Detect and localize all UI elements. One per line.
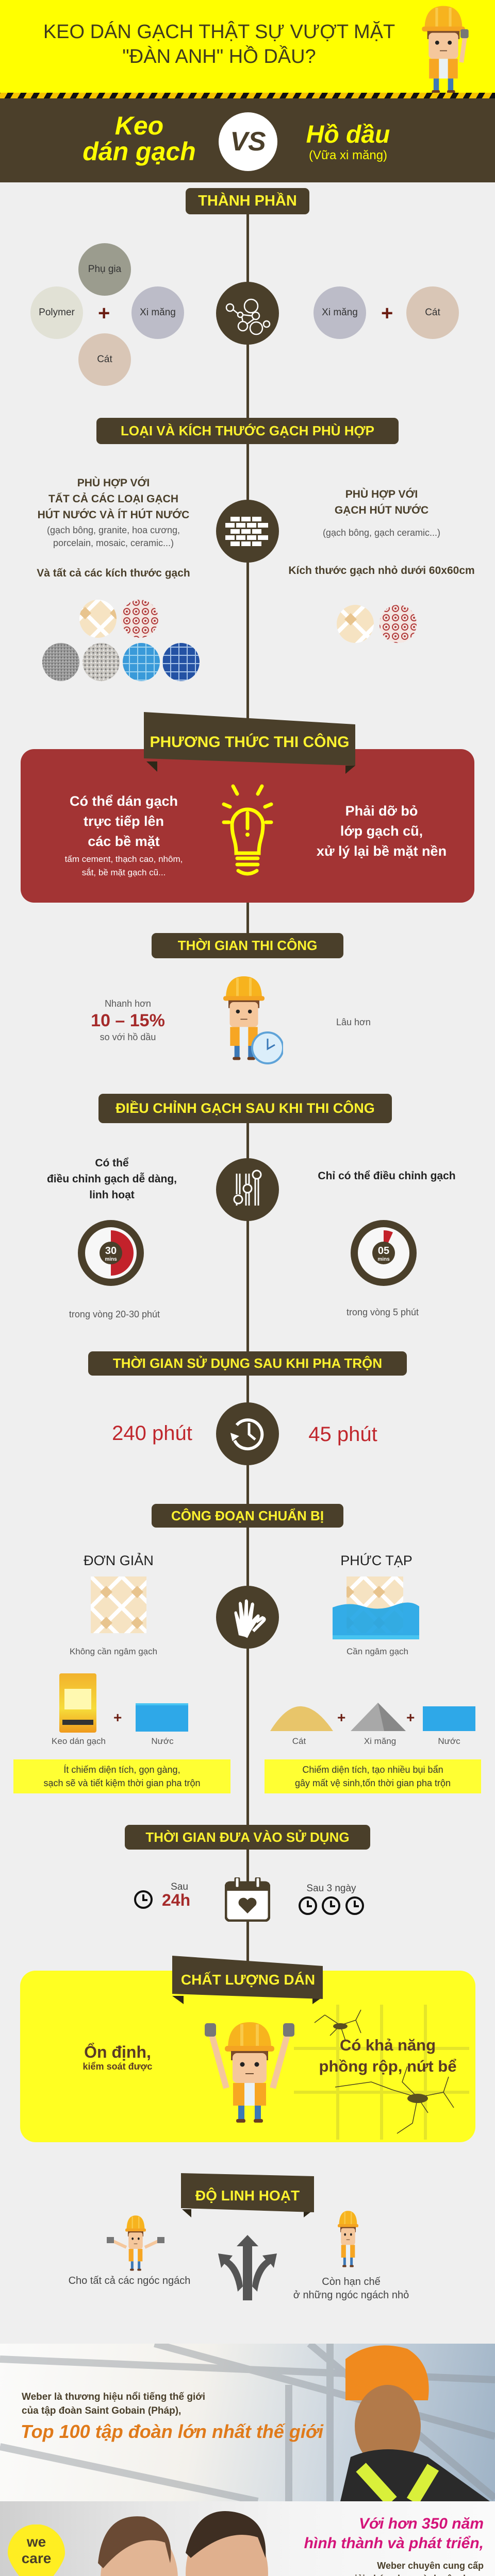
section: thời gian đưa vào sử dụng: [246, 1850, 249, 1971]
text: after 3 days: [299, 1883, 364, 1915]
left title: Keo dán gạch: [82, 111, 196, 166]
ingredients left: Phụ gia: [88, 264, 121, 275]
text: keo tile suitability: [37, 476, 190, 579]
icon: dry tile: [91, 1577, 146, 1633]
text: 240 phút: 240 phút: [112, 1422, 192, 1445]
text: limited: [278, 2275, 424, 2302]
ingredients left: +: [98, 302, 110, 325]
ribbon: độ linh hoạt: ĐỘ LINH HOẠT: [195, 2187, 300, 2204]
text: weber intro: Weber là thương hiệu nổi tiếng thế giới: [22, 2392, 205, 2402]
right title: Hồ dầu: (Vữa xi măng): [309, 148, 387, 162]
text: ho dau tile suitability: (gạch bông, gạch ceramic...): [323, 528, 440, 538]
text: ho dau tile suitability: Kích thước gạch nhỏ dưới 60x60cm: [288, 565, 475, 577]
icon: composition: [216, 282, 279, 345]
photo: weber construction worker: [0, 2344, 495, 2501]
text: 350 years: [304, 2514, 484, 2576]
icon: happy worker: [107, 2215, 164, 2271]
text: ho dau tile suitability: GẠCH HÚT NƯỚC: [335, 504, 428, 516]
icon: brick: [216, 500, 279, 563]
text: CÔNG ĐOẠN CHUẨN BỊ: [171, 1507, 324, 1523]
text: keo tile suitability: PHÙ HỢP VỚI: [77, 477, 150, 489]
icon: worker with clock: [223, 976, 283, 1064]
tile samples right: [337, 605, 417, 643]
icon: sad worker: [338, 2211, 358, 2267]
text: after 24h: Sau: [171, 1882, 188, 1892]
text: 350 years: Với hơn 350 năm: [359, 2515, 484, 2532]
icon: timer 05: [351, 1220, 417, 1286]
photo: couple: [0, 2501, 495, 2576]
ribbon: chất lượng dán: CHẤT LƯỢNG DÁN: [181, 1972, 315, 1988]
section: thành phần: [246, 214, 249, 418]
icon: we care pin: care: [22, 2550, 51, 2566]
text: faster: Nhanh hơn: [105, 998, 151, 1009]
ingredients left: [30, 243, 184, 386]
icon: timer 05: 05: [378, 1245, 389, 1257]
text: keo adjust: Có thể: [95, 1157, 129, 1169]
products: cát + xi măng + nước: [270, 1703, 475, 1746]
ingredients left: Polymer: [39, 307, 75, 318]
products: cát + xi măng + nước: Xi măng: [364, 1736, 396, 1746]
text: keo method: tấm cement, thạch cao, nhôm,: [65, 854, 183, 864]
icon: we care pin: we: [27, 2534, 46, 2550]
callout: keo benefits: [13, 1759, 230, 1793]
left title: Keo dán gạch: dán gạch: [82, 137, 196, 166]
icon: light bulb: [222, 784, 273, 876]
title: [43, 21, 395, 67]
text: keo method: Có thể dán gạch: [70, 793, 178, 809]
text: stable: Ổn định,: [84, 2043, 151, 2061]
text: after 3 days: Sau 3 ngày: [306, 1883, 356, 1894]
text: LOẠI VÀ KÍCH THƯỚC GẠCH PHÙ HỢP: [121, 423, 374, 438]
text: keo tile suitability: TẤT CẢ CÁC LOẠI GẠCH: [48, 493, 178, 505]
text: keo adjust: linh hoạt: [89, 1189, 135, 1201]
ingredients right: +: [381, 302, 393, 325]
callout: keo benefits: sạch sẽ và tiết kiệm thời gian pha trộn: [44, 1778, 200, 1788]
section: thời gian sử dụng: [246, 1376, 249, 1504]
text: keo method: các bề mặt: [88, 834, 160, 849]
text: ho dau method: xử lý lại bề mặt nền: [317, 843, 447, 859]
ribbon: phương thức thi công: [144, 712, 355, 774]
text: slower: Lâu hơn: [336, 1017, 371, 1027]
text: 5 minutes: trong vòng 5 phút: [346, 1307, 419, 1317]
text: ho dau method: Phải dỡ bỏ: [345, 803, 418, 819]
ingredients right: Xi măng: [322, 307, 358, 318]
right title: Hồ dầu: [306, 121, 390, 162]
products: cát + xi măng + nước: Nước: [438, 1736, 460, 1746]
products: keo + nước: Nước: [151, 1736, 174, 1746]
ingredients left: Xi măng: [140, 307, 176, 318]
section: điều chỉnh gạch: [246, 1123, 249, 1351]
icon: tile in water: [333, 1577, 419, 1639]
vs circle: [219, 112, 277, 171]
icon: fork arrow: [218, 2235, 277, 2300]
text: limited: Còn hạn chế: [322, 2276, 381, 2287]
panel: chất lượng dán: [20, 1971, 475, 2142]
callout: ho dau drawbacks: Chiếm diện tích, tạo nhiều bụi bẩn: [302, 1765, 443, 1775]
text: cracking risk: phồng rộp, nứt bể: [319, 2057, 456, 2075]
ingredients left: Cát: [97, 354, 112, 365]
text: after 24h: 24h: [162, 1891, 190, 1909]
products: cát + xi măng + nước: +: [406, 1709, 415, 1725]
text: top 100: Top 100 tập đoàn lớn nhất thế giới: [21, 2421, 323, 2442]
text: weber intro: [22, 2390, 205, 2418]
vs circle: VS: [230, 127, 266, 157]
text: soaking required: Cần ngâm gạch: [346, 1647, 408, 1656]
cracked tiles background: [294, 2005, 469, 2140]
section: thời gian thi công: [246, 903, 249, 934]
text: THÀNH PHẦN: [198, 193, 297, 209]
text: keo method: trực tiếp lên: [84, 814, 164, 829]
text: after 24h: [134, 1882, 190, 1909]
text: keo tile suitability: porcelain, mosaic, ceramic...): [53, 538, 174, 548]
icon: hands: [216, 1586, 279, 1649]
section: công đoạn chuẩn bị: [246, 1528, 249, 1825]
text: THỜI GIAN SỬ DỤNG SAU KHI PHA TRỘN: [113, 1355, 382, 1371]
icon: timer 30: mins: [105, 1257, 117, 1262]
text: THỜI GIAN ĐƯA VÀO SỬ DỤNG: [145, 1829, 350, 1844]
icon: worker pointing: [205, 2022, 294, 2123]
products: cát + xi măng + nước: Cát: [292, 1736, 306, 1746]
products: cát + xi măng + nước: +: [337, 1709, 345, 1725]
text: all corners: Cho tất cả các ngóc ngách: [69, 2275, 190, 2286]
text: weber intro: của tập đoàn Saint Gobain (Pháp),: [22, 2405, 181, 2416]
callout: keo benefits: Ít chiếm diện tích, gọn gàng,: [63, 1765, 180, 1775]
text: 350 years: Weber chuyên cung cấp: [377, 2561, 484, 2571]
ingredients right: Cát: [425, 307, 440, 318]
text: keo adjust: điều chỉnh gạch dễ dàng,: [47, 1173, 177, 1185]
text: stable: [83, 2042, 152, 2072]
ribbon: phương thức thi công: PHƯƠNG THỨC THI CÔNG: [150, 733, 350, 751]
text: keo method: sắt, bề mặt gạch cũ...: [82, 868, 166, 877]
callout: ho dau drawbacks: [265, 1759, 481, 1793]
text: ho dau adjust: Chỉ có thể điều chỉnh gạch: [318, 1170, 456, 1182]
products: keo + nước: Keo dán gạch: [52, 1736, 106, 1746]
vs band: [0, 98, 495, 182]
icon: timer 05: mins: [377, 1257, 390, 1262]
ingredients right: [314, 286, 459, 339]
text: 45 phút: 45 phút: [308, 1423, 377, 1446]
text: keo tile suitability: (gạch bông, granite, hoa cương,: [47, 525, 180, 535]
text: stable: kiểm soát được: [83, 2061, 152, 2072]
tile samples left: [42, 600, 200, 681]
text: ho dau tile suitability: PHÙ HỢP VỚI: [345, 488, 418, 500]
icon: timer 30: [78, 1220, 144, 1286]
text: faster: [91, 998, 165, 1042]
products: keo + nước: [52, 1673, 188, 1746]
left title: Keo dán gạch: Keo: [115, 111, 163, 140]
text: limited: ở những ngóc ngách nhỏ: [293, 2290, 409, 2301]
icon: history clock: [216, 1402, 279, 1465]
section: loại gạch: [246, 444, 249, 722]
icon: timer 30: 30: [105, 1245, 117, 1257]
ribbon: độ linh hoạt: [181, 2173, 314, 2217]
text: THỜI GIAN THI CÔNG: [178, 938, 317, 953]
text: phức tạp: PHỨC TẠP: [340, 1553, 412, 1568]
right title: Hồ dầu: Hồ dầu: [306, 121, 390, 148]
ribbon: chất lượng dán: [172, 1956, 323, 2004]
text: faster: so với hồ dầu: [100, 1032, 156, 1042]
text: 20-30 minutes: trong vòng 20-30 phút: [69, 1309, 160, 1319]
panel: phương thức thi công: [21, 749, 474, 903]
text: keo tile suitability: Và tất cả các kích thước gạch: [37, 567, 190, 579]
text: no soaking: Không cần ngâm gạch: [70, 1647, 157, 1656]
text: ho dau tile suitability: [288, 487, 475, 577]
icon: sliders: [216, 1158, 279, 1221]
text: đơn giản: ĐƠN GIẢN: [84, 1553, 154, 1568]
icon: we care pin: [8, 2524, 65, 2576]
text: keo method: [65, 793, 183, 877]
products: keo + nước: +: [113, 1709, 122, 1725]
title: KEO DÁN GẠCH THẬT SỰ VƯỢT MẶT: [43, 21, 395, 43]
text: ĐIỀU CHỈNH GẠCH SAU KHI THI CÔNG: [116, 1100, 375, 1116]
text: keo tile suitability: HÚT NƯỚC VÀ ÍT HÚT NƯỚC: [38, 509, 189, 521]
callout: ho dau drawbacks: gây mất vệ sinh,tốn thời gian pha trộn: [295, 1778, 451, 1788]
header banner: [0, 0, 495, 94]
text: cracking risk: Có khả năng: [340, 2036, 436, 2054]
text: ho dau method: [317, 803, 447, 859]
text: 350 years: hình thành và phát triển,: [304, 2535, 484, 2552]
icon: worker mascot: [422, 6, 469, 93]
title: "ĐÀN ANH" HỒ DẦU?: [122, 46, 316, 67]
text: keo adjust: [47, 1157, 177, 1201]
text: ho dau method: lớp gạch cũ,: [340, 823, 423, 839]
icon: calendar: [225, 1877, 270, 1922]
text: cracking risk: [319, 2036, 456, 2075]
text: faster: 10 – 15%: [91, 1011, 165, 1030]
